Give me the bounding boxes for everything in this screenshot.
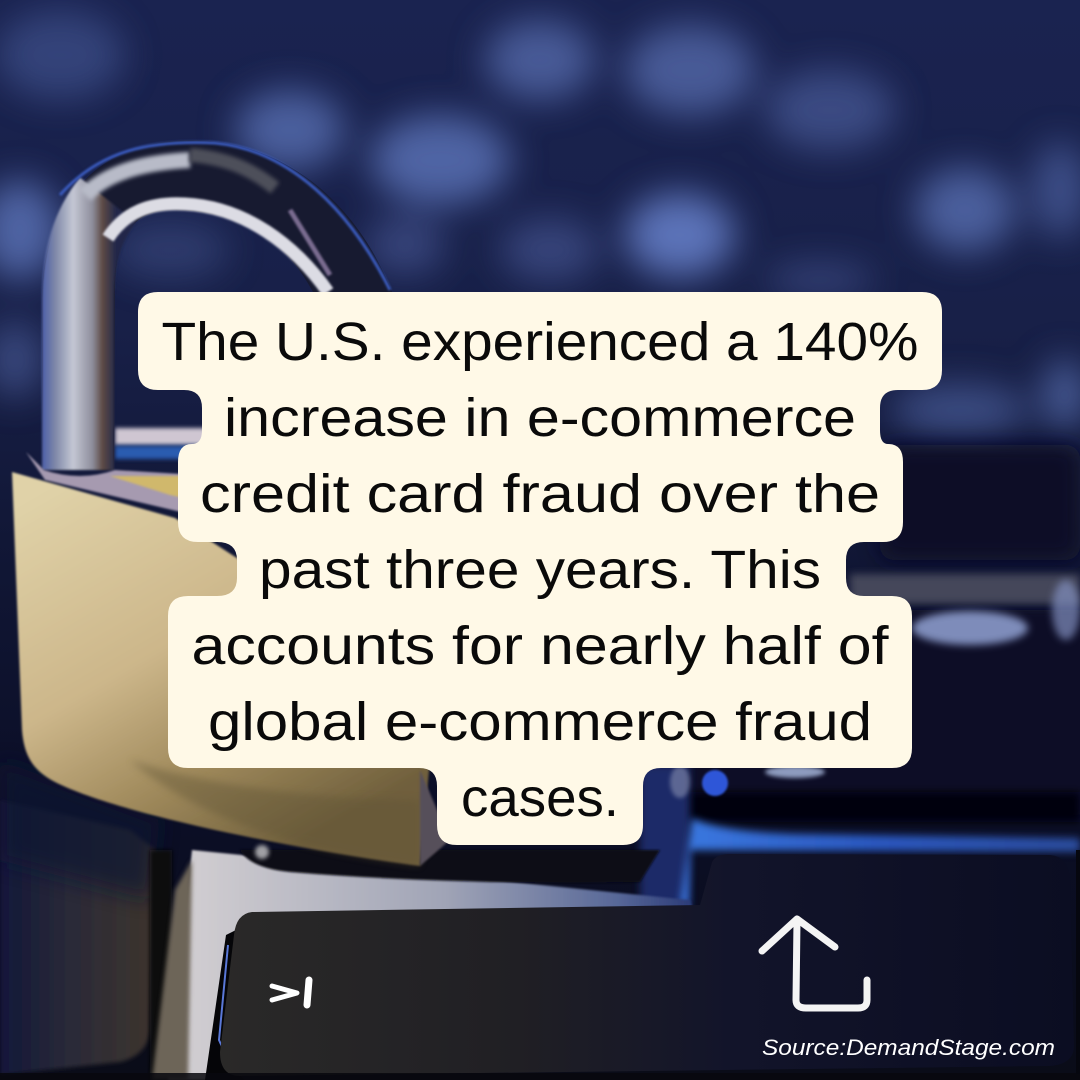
main statement text: global e-commerce fraud: [208, 692, 872, 752]
padlock shackle: [42, 140, 392, 470]
left key: [0, 800, 155, 1075]
main statement text: credit card fraud over the: [200, 464, 880, 524]
upper right dark key: [880, 445, 1080, 560]
blue light strip: [680, 818, 1080, 905]
main statement text: cases.: [461, 768, 619, 828]
stripes behind shackle: [115, 428, 215, 445]
shackle silver top: [85, 160, 190, 195]
padlock body: [12, 472, 430, 866]
grey key edge band: [850, 574, 1080, 604]
padlock: [12, 140, 450, 866]
padlock top plate: [26, 452, 215, 520]
key gap: [205, 930, 245, 1080]
main statement text: increase in e-commerce: [224, 388, 856, 448]
main statement text: accounts for nearly half of: [192, 616, 890, 676]
key: tab and return: [220, 854, 1074, 1076]
lower right dark key: [650, 610, 1080, 815]
icon: return arrow: [762, 919, 867, 1008]
shackle bright inner band: [108, 204, 328, 292]
keyboard keys: [0, 760, 1080, 1080]
main statement text: past three years. This: [259, 540, 821, 600]
key above tab, under padlock: [240, 850, 660, 883]
source credit: Source:DemandStage.com: [762, 1035, 1055, 1060]
padlock screw glint: [255, 845, 269, 859]
text highlight panel: [138, 292, 942, 845]
keyboard chassis: [168, 850, 695, 1080]
icon: tab key symbol: [272, 980, 309, 1005]
main statement text: The U.S. experienced a 140%: [162, 312, 918, 372]
blurred lights: [912, 611, 1028, 645]
main statement text: [162, 312, 918, 828]
